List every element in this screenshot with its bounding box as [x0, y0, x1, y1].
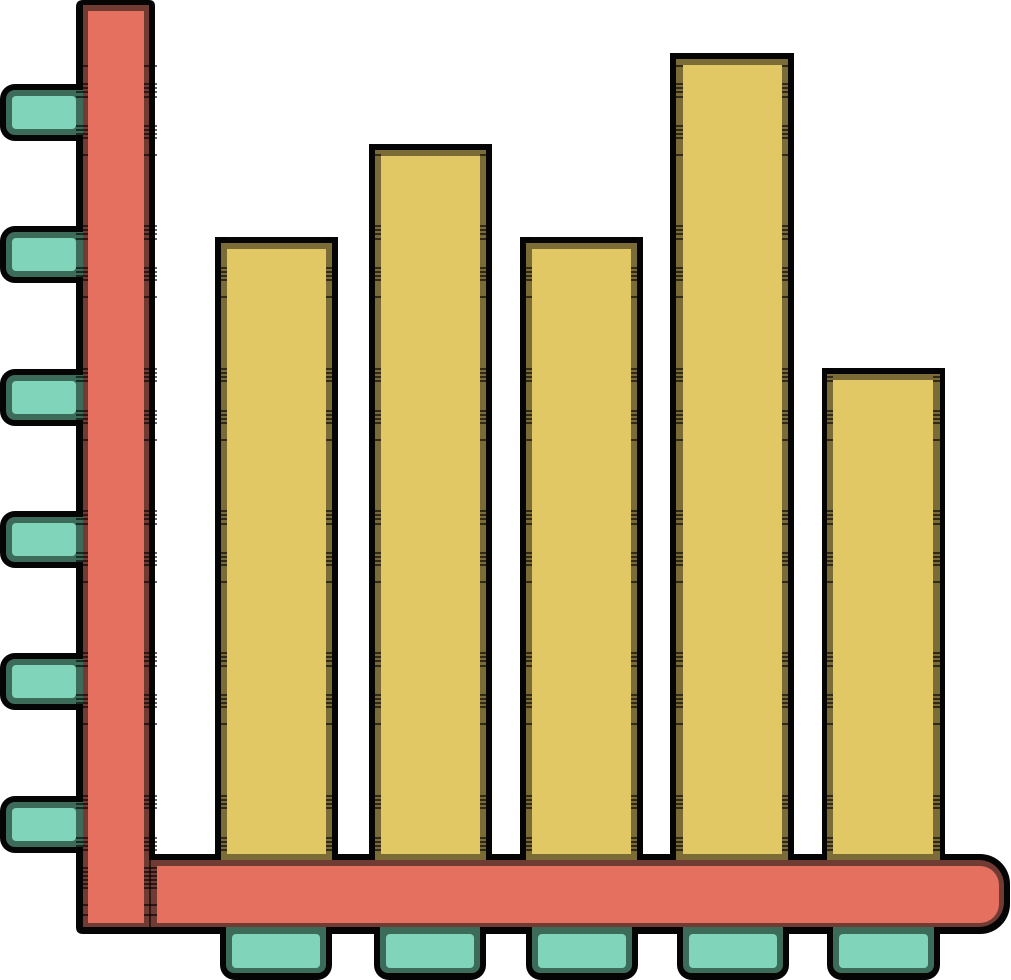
- x tick 5: [827, 927, 940, 980]
- bar 5: [822, 368, 945, 860]
- tick 4: [0, 511, 83, 568]
- x tick 1: [220, 927, 332, 980]
- x tick 4: [677, 927, 789, 980]
- hatching: [76, 65, 940, 916]
- tick 2: [0, 226, 83, 283]
- bar 2: [369, 144, 492, 860]
- x tick 2: [374, 927, 486, 980]
- tick 3: [0, 369, 83, 426]
- tick 5: [0, 653, 83, 710]
- bar 4: [670, 53, 794, 860]
- bar 1: [215, 237, 338, 860]
- tick 1: [0, 84, 83, 141]
- x tick 3: [526, 927, 638, 980]
- y-axis tick marks: [0, 84, 83, 853]
- bar 3: [520, 237, 643, 860]
- bars: [215, 53, 945, 860]
- tick 6: [0, 796, 83, 853]
- x-axis tick marks: [220, 927, 940, 980]
